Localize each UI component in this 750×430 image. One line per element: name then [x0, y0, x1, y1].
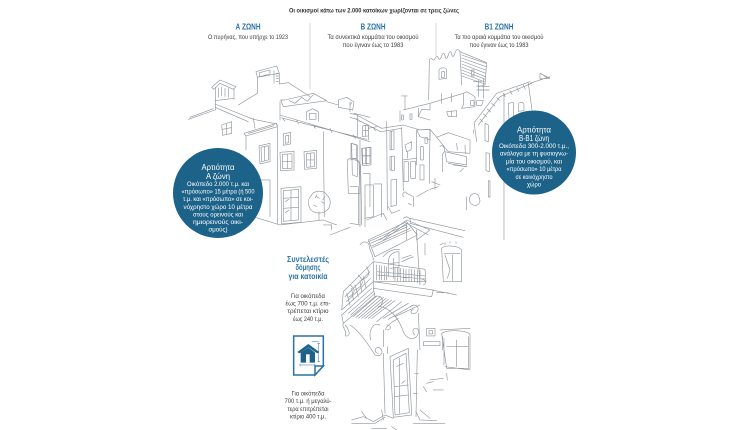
- text: plots over 700: κτίριο 400 τ.μ.: [290, 415, 326, 421]
- zone A label: Α ΖΩΝΗ: [236, 22, 261, 32]
- text: plots up to 700: έως 700 τ.μ. επι-: [286, 300, 330, 308]
- zone B label: Β ΖΩΝΗ: [360, 22, 386, 32]
- heading: building coefficients: δόμησης: [296, 263, 320, 272]
- zone A label: [208, 22, 289, 41]
- zone B label: [328, 22, 418, 49]
- callout: zone B-B1: Αρτιότητα: [517, 126, 551, 134]
- callout: zone A: τ.μ. και «πρόσωπο» σε κοι-: [183, 196, 253, 203]
- callout: zone B-B1: [492, 110, 576, 194]
- text: plots up to 700: [286, 293, 330, 323]
- icon: house plan document: [294, 336, 323, 375]
- title: Οι οικισμοί κάτω των 2.000 κατοίκων χωρίζονται σε τρεις ζώνες: [289, 8, 460, 14]
- callout: zone A: «πρόσωπο» 15 μέτρα (ή 500: [182, 188, 255, 196]
- callout: zone B-B1: ανάλογα με τη φυσιογνω-: [500, 150, 568, 158]
- zone B label: Τα συνεκτικά κομμάτια του οικισμού: [328, 34, 418, 41]
- callout: zone A: [173, 148, 263, 238]
- zone B label: που έγιναν έως το 1983: [342, 42, 404, 49]
- text: plots up to 700: έως 240 τ.μ.: [293, 316, 323, 323]
- heading: building coefficients: [287, 255, 329, 281]
- callout: zone A: στους ορεινούς και: [193, 212, 244, 218]
- text: plots up to 700: Για οικόπεδα: [291, 293, 326, 300]
- callout: zone A: Α ζώνη: [206, 172, 230, 181]
- callout: zone B-B1: Β-Β1 ζώνη: [519, 134, 549, 143]
- heading: building coefficients: για κατοικία: [288, 272, 328, 281]
- sketch: left buildings: [188, 66, 377, 230]
- sketch: balcony house: [330, 217, 470, 430]
- text: plots over 700: Για οικόπεδα: [292, 391, 325, 398]
- text: plots over 700: τερα επιτρέπεται: [288, 406, 329, 413]
- callout: zone B-B1: Οικόπεδα 300-2.000 τ.μ.,: [499, 143, 569, 150]
- callout: zone B-B1: μία του οικισμού, και: [506, 160, 563, 166]
- callout: zone A: νόχρηστο χώρο 10 μέτρα: [184, 204, 253, 211]
- callout: zone A: Αρτιότητα: [202, 163, 235, 172]
- callout: zone A: ημιορεινούς οικι-: [193, 220, 243, 226]
- zone A label: Ο πυρήνας, που υπήρχε το 1923: [208, 34, 289, 41]
- sketch: right buildings and tower: [350, 49, 550, 240]
- zone B1 label: Β1 ΖΩΝΗ: [484, 22, 514, 32]
- callout: zone A: Οικόπεδο 2.000 τ.μ. και: [187, 181, 250, 188]
- zone B1 label: [454, 22, 544, 49]
- heading: building coefficients: Συντελεστές: [287, 255, 329, 264]
- zone B1 label: που έγιναν έως το 1983: [470, 42, 529, 49]
- zone B1 label: Τα πιο αραιά κομμάτια του οικισμού: [454, 34, 544, 41]
- text: plots over 700: [284, 391, 332, 421]
- callout: zone B-B1: χώρο: [527, 182, 542, 188]
- leader lines: [310, 23, 436, 89]
- callout: zone B-B1: «πρόσωπο» 10 μέτρα: [506, 166, 562, 173]
- callout: zone B-B1: σε κοινόχρηστο: [516, 174, 553, 181]
- callout: zone A: σμούς): [208, 228, 228, 234]
- text: plots over 700: 700 τ.μ. ή μεγαλύ-: [284, 398, 332, 405]
- text: plots up to 700: τρέπεται κτίριο: [288, 308, 329, 315]
